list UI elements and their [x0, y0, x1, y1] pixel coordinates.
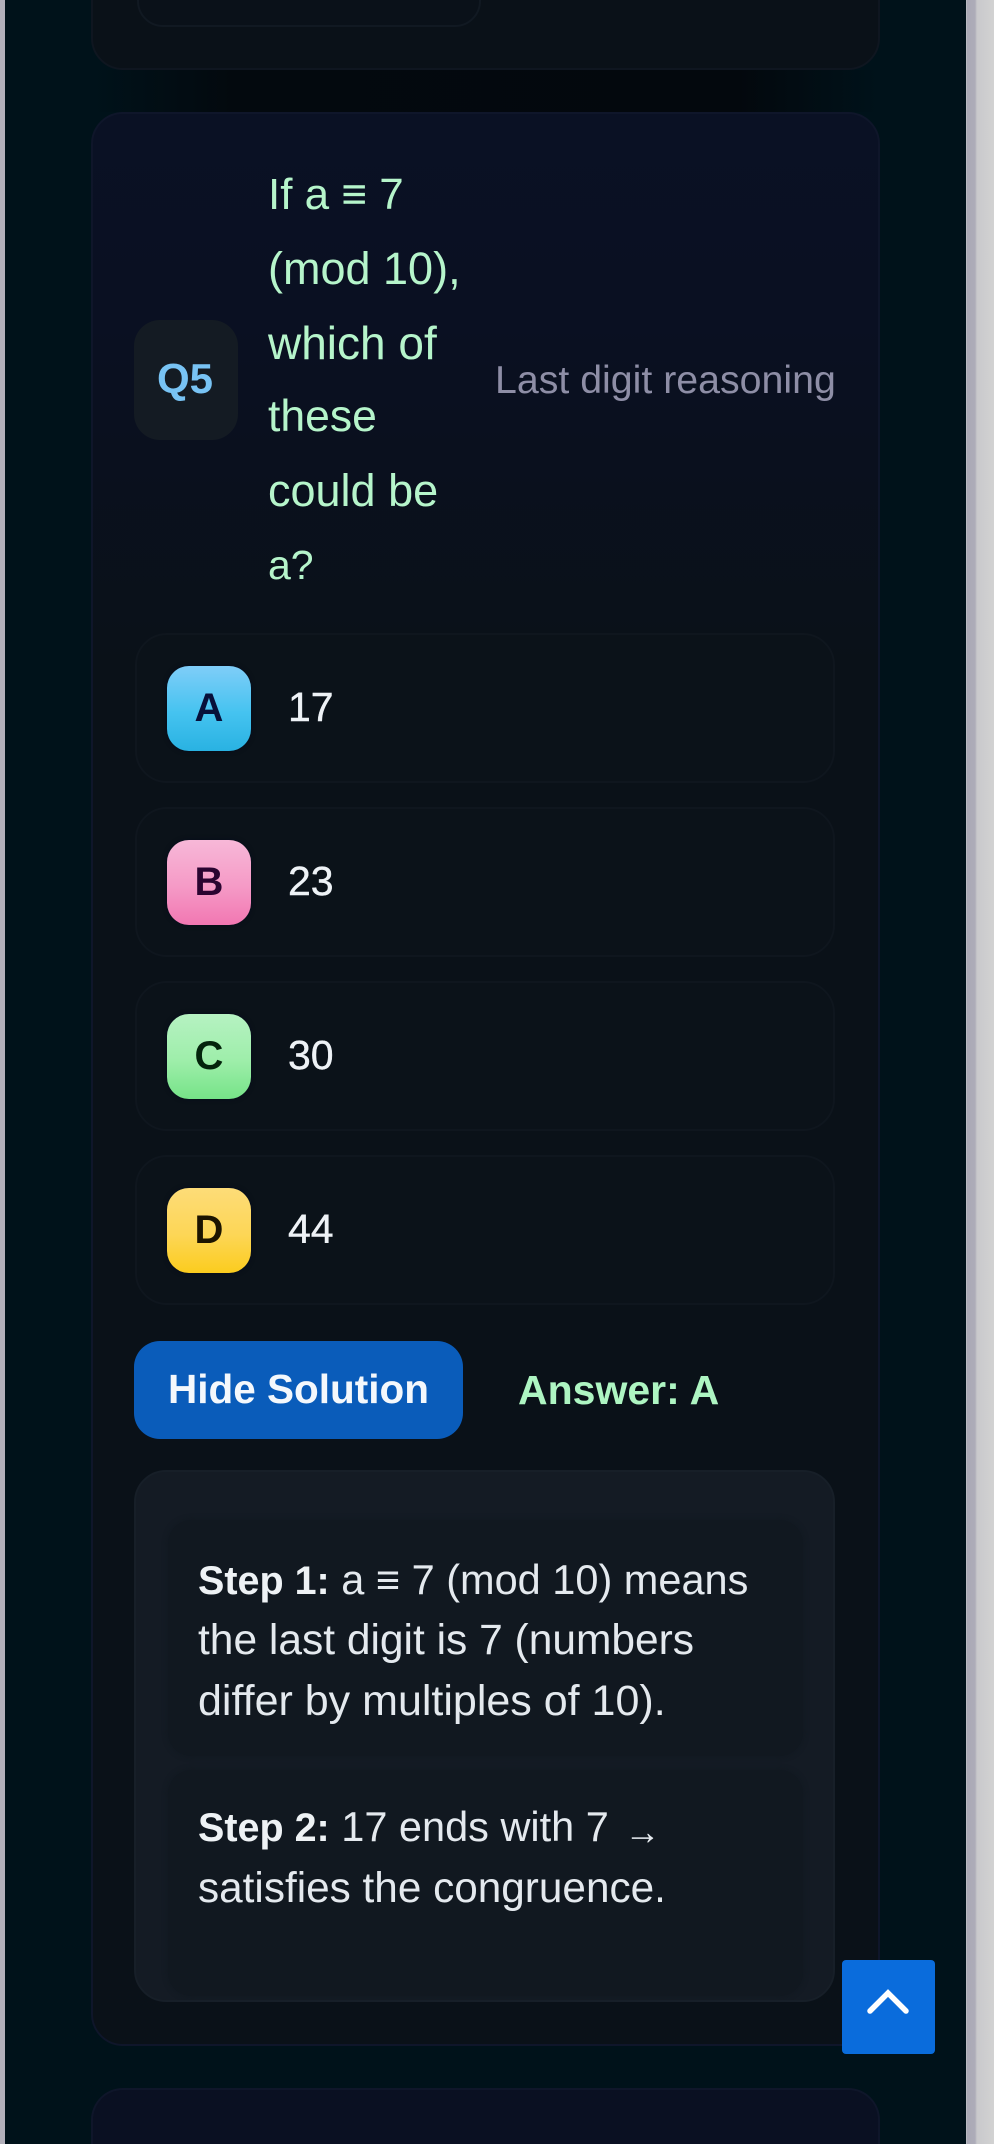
- right device edge: [966, 0, 994, 2144]
- option B value: 23: [288, 858, 334, 904]
- option D value: 44: [288, 1206, 334, 1252]
- question text: If a ≡ 7: [268, 170, 404, 219]
- question text: (mod 10),: [268, 243, 461, 294]
- badge B: B: [195, 860, 223, 904]
- button label: Hide Solution: [168, 1366, 429, 1412]
- badge B: [167, 840, 251, 925]
- question number pill: [134, 320, 238, 440]
- scroll to top button: [842, 1960, 935, 2054]
- question text: a?: [268, 542, 314, 588]
- badge A: [167, 666, 251, 751]
- question text: could be: [268, 465, 438, 516]
- badge D: D: [195, 1208, 223, 1252]
- step 1 text: [198, 1556, 748, 1725]
- step 2 text: [198, 1803, 666, 1911]
- option B: [135, 807, 835, 957]
- panel: solution: [134, 1470, 835, 2002]
- step 2 text: satisfies the congruence.: [198, 1864, 666, 1911]
- panel: next question card (cropped): [91, 2088, 880, 2144]
- panel: previous question card (cropped): [91, 0, 880, 70]
- option A value: 17: [288, 684, 334, 730]
- option D: [135, 1155, 835, 1305]
- option A: [135, 633, 835, 783]
- question number: Q5: [157, 355, 213, 402]
- step 2 box: [168, 1770, 803, 1996]
- badge A: A: [195, 686, 223, 730]
- question text: these: [268, 392, 377, 441]
- topic tag: Last digit reasoning: [495, 358, 836, 402]
- question text: which of: [268, 317, 437, 369]
- panel: question 5 card: [91, 112, 880, 2046]
- hide solution button: [134, 1341, 463, 1439]
- option C value: 30: [288, 1032, 334, 1078]
- badge C: [167, 1014, 251, 1099]
- step 1 box: [168, 1520, 803, 1756]
- step 1 text: differ by multiples of 10).: [198, 1677, 666, 1725]
- previous inner box (cropped): [137, 0, 481, 27]
- left device edge: [0, 0, 5, 2144]
- step 1 text: Step 1: a ≡ 7 (mod 10) means: [198, 1556, 748, 1603]
- icon: chevron up: [867, 1989, 909, 2014]
- step 2 text: Step 2: 17 ends with 7 →: [198, 1803, 660, 1852]
- badge D: [167, 1188, 251, 1273]
- option C: [135, 981, 835, 1131]
- step 1 text: the last digit is 7 (numbers: [198, 1617, 694, 1664]
- question text: [268, 170, 461, 588]
- answer label: Answer: A: [518, 1367, 719, 1413]
- badge C: C: [195, 1034, 223, 1078]
- gap between cards: [91, 70, 880, 112]
